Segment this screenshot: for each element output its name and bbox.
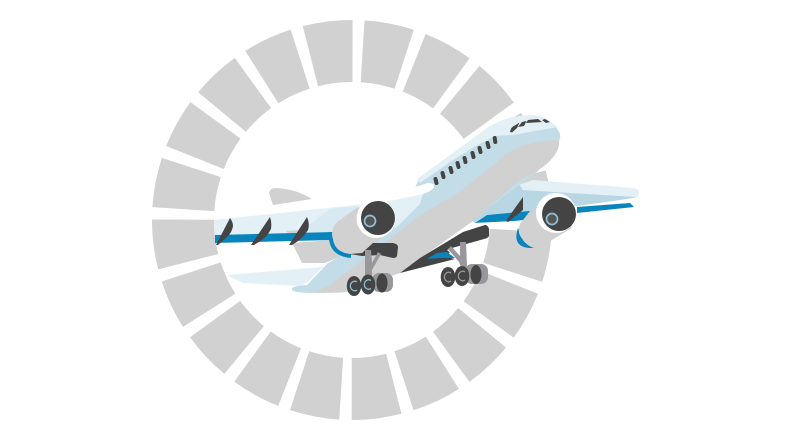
near engine pylon	[350, 243, 398, 258]
belly white notch	[447, 248, 456, 258]
cockpit windows	[510, 119, 550, 132]
rear gear middle hub	[458, 271, 465, 281]
near wing inboard tint	[300, 206, 358, 232]
far engine nacelle	[519, 208, 572, 245]
far engine blue crescent	[516, 228, 534, 248]
rear gear middle wheel	[455, 266, 469, 286]
rear gear inner wheel	[470, 265, 482, 284]
front landing gear	[347, 250, 393, 296]
near engine nacelle	[332, 207, 395, 255]
front gear strut	[365, 250, 381, 278]
near engine blue arc	[331, 232, 351, 256]
far wing upper surface	[518, 180, 639, 200]
near winglets	[216, 217, 309, 245]
rear gear left wheel	[441, 267, 455, 287]
segmented grey ring	[173, 41, 531, 399]
near engine intake	[356, 199, 396, 238]
tail fin	[269, 188, 312, 205]
wing root fairing	[362, 194, 423, 232]
fuselage grey belly	[313, 140, 559, 293]
fuselage light top band	[417, 115, 558, 183]
near wing surface	[214, 194, 423, 235]
far wing white underside	[470, 221, 520, 230]
rear wheel	[372, 273, 393, 292]
middle wheel	[361, 274, 375, 294]
far engine intake	[536, 193, 576, 233]
far wing fairing	[506, 197, 523, 222]
near wing blue stripe	[215, 232, 333, 243]
far wing	[470, 178, 639, 248]
middle hub	[364, 280, 371, 289]
airplane	[214, 115, 639, 296]
inner wheel	[376, 274, 388, 292]
tailplane	[227, 267, 323, 286]
grey tail section	[286, 230, 347, 263]
rear landing gear	[441, 242, 488, 287]
wing leading edge	[360, 183, 434, 204]
fuselage blue side	[292, 115, 560, 293]
belly blue sliver	[427, 252, 455, 259]
left wheel	[347, 276, 361, 296]
far wing blue stripe	[475, 203, 634, 223]
near wing	[214, 194, 423, 286]
left hub	[350, 281, 357, 291]
rear gear left hub	[444, 272, 451, 282]
rear gear back wheel	[465, 264, 488, 284]
far wing lower surface	[470, 178, 637, 223]
passenger windows	[436, 138, 495, 183]
wing strake	[400, 225, 489, 273]
rear gear strut	[448, 242, 467, 267]
